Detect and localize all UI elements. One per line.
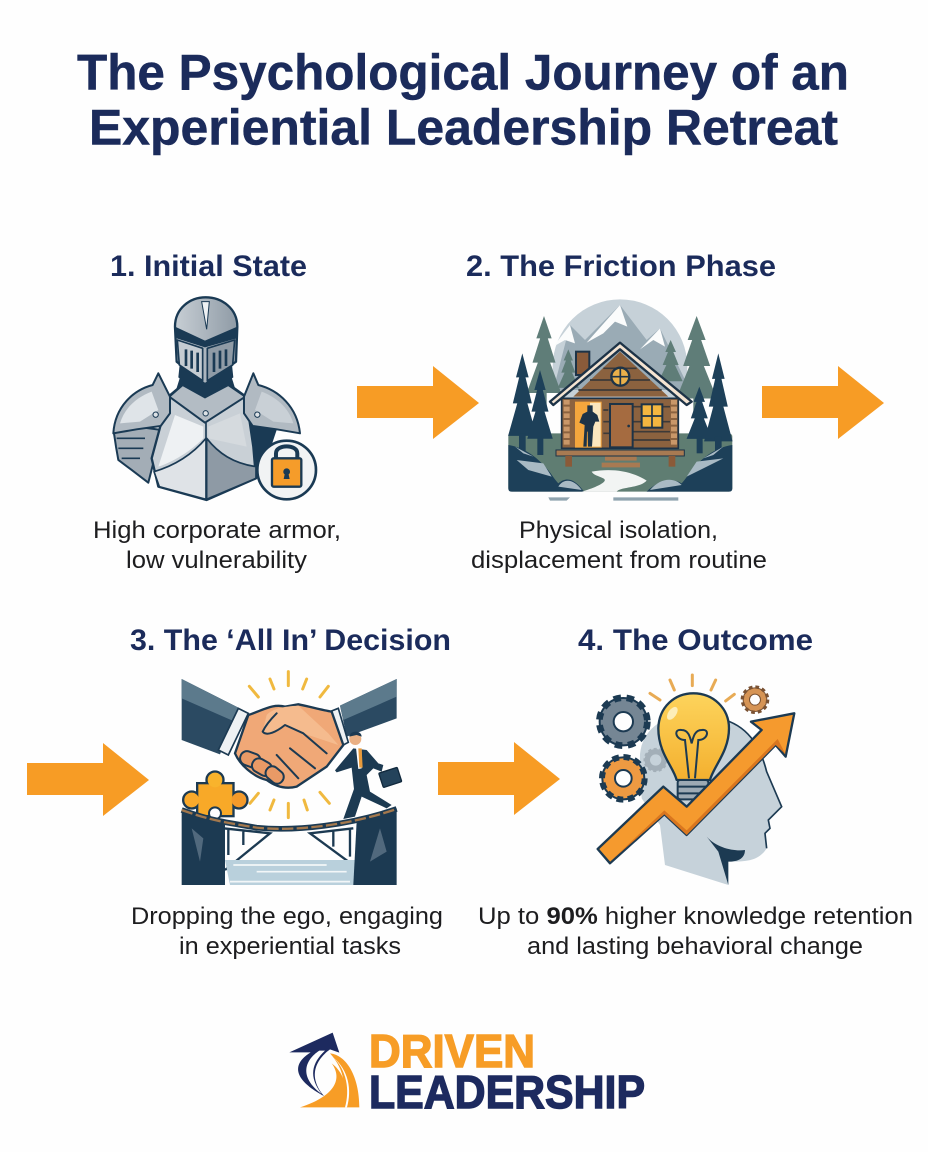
panel: step 3 all in decision xyxy=(130,624,451,960)
description: step 1: low vulnerability xyxy=(126,547,308,574)
title: Experiential Leadership Retreat xyxy=(89,100,838,156)
heading: step 1: 1. Initial State xyxy=(110,250,307,283)
logo text: Driven: DRIVEN xyxy=(369,1025,535,1077)
description: step 4: Up to 90% higher knowledge retention xyxy=(478,903,913,930)
panel: step 1 initial state xyxy=(93,250,341,574)
arrow: step 2 onward xyxy=(762,366,884,439)
description: step 3: Dropping the ego, engaging xyxy=(131,903,443,930)
description: step 1: High corporate armor, xyxy=(93,517,341,544)
description: step 4 xyxy=(478,903,913,960)
description: step 2: Physical isolation, xyxy=(519,517,718,544)
icon: log cabin in forest xyxy=(508,299,733,501)
description: step 2: displacement from routine xyxy=(471,547,767,574)
description: step 2 xyxy=(471,517,767,574)
title: The Psychological Journey of an xyxy=(77,44,849,100)
icon: logo swoosh arrow xyxy=(289,1033,359,1107)
heading: step 2: 2. The Friction Phase xyxy=(466,250,776,283)
arrow: step 3 to 4 xyxy=(438,742,560,815)
heading: step 4: 4. The Outcome xyxy=(578,624,813,657)
description: step 3: in experiential tasks xyxy=(179,933,401,960)
logo text: Leadership: LEADERSHIP xyxy=(369,1066,645,1118)
arrow: into step 3 xyxy=(27,743,149,816)
heading: step 3: 3. The ‘All In’ Decision xyxy=(130,624,451,657)
description: step 1 xyxy=(93,517,341,574)
title xyxy=(77,44,849,156)
logo: Driven Leadership xyxy=(289,1025,645,1118)
panel: step 2 friction phase xyxy=(466,250,776,574)
icon: head with light bulb, gears and rising arrow xyxy=(598,675,794,885)
icon: knight armor with padlock xyxy=(113,297,316,500)
panel: step 4 outcome xyxy=(478,624,913,960)
description: step 4: and lasting behavioral change xyxy=(527,933,863,960)
icon: handshake and bridge xyxy=(182,672,402,885)
arrow: step 1 to 2 xyxy=(357,366,479,439)
description: step 3 xyxy=(131,903,443,960)
